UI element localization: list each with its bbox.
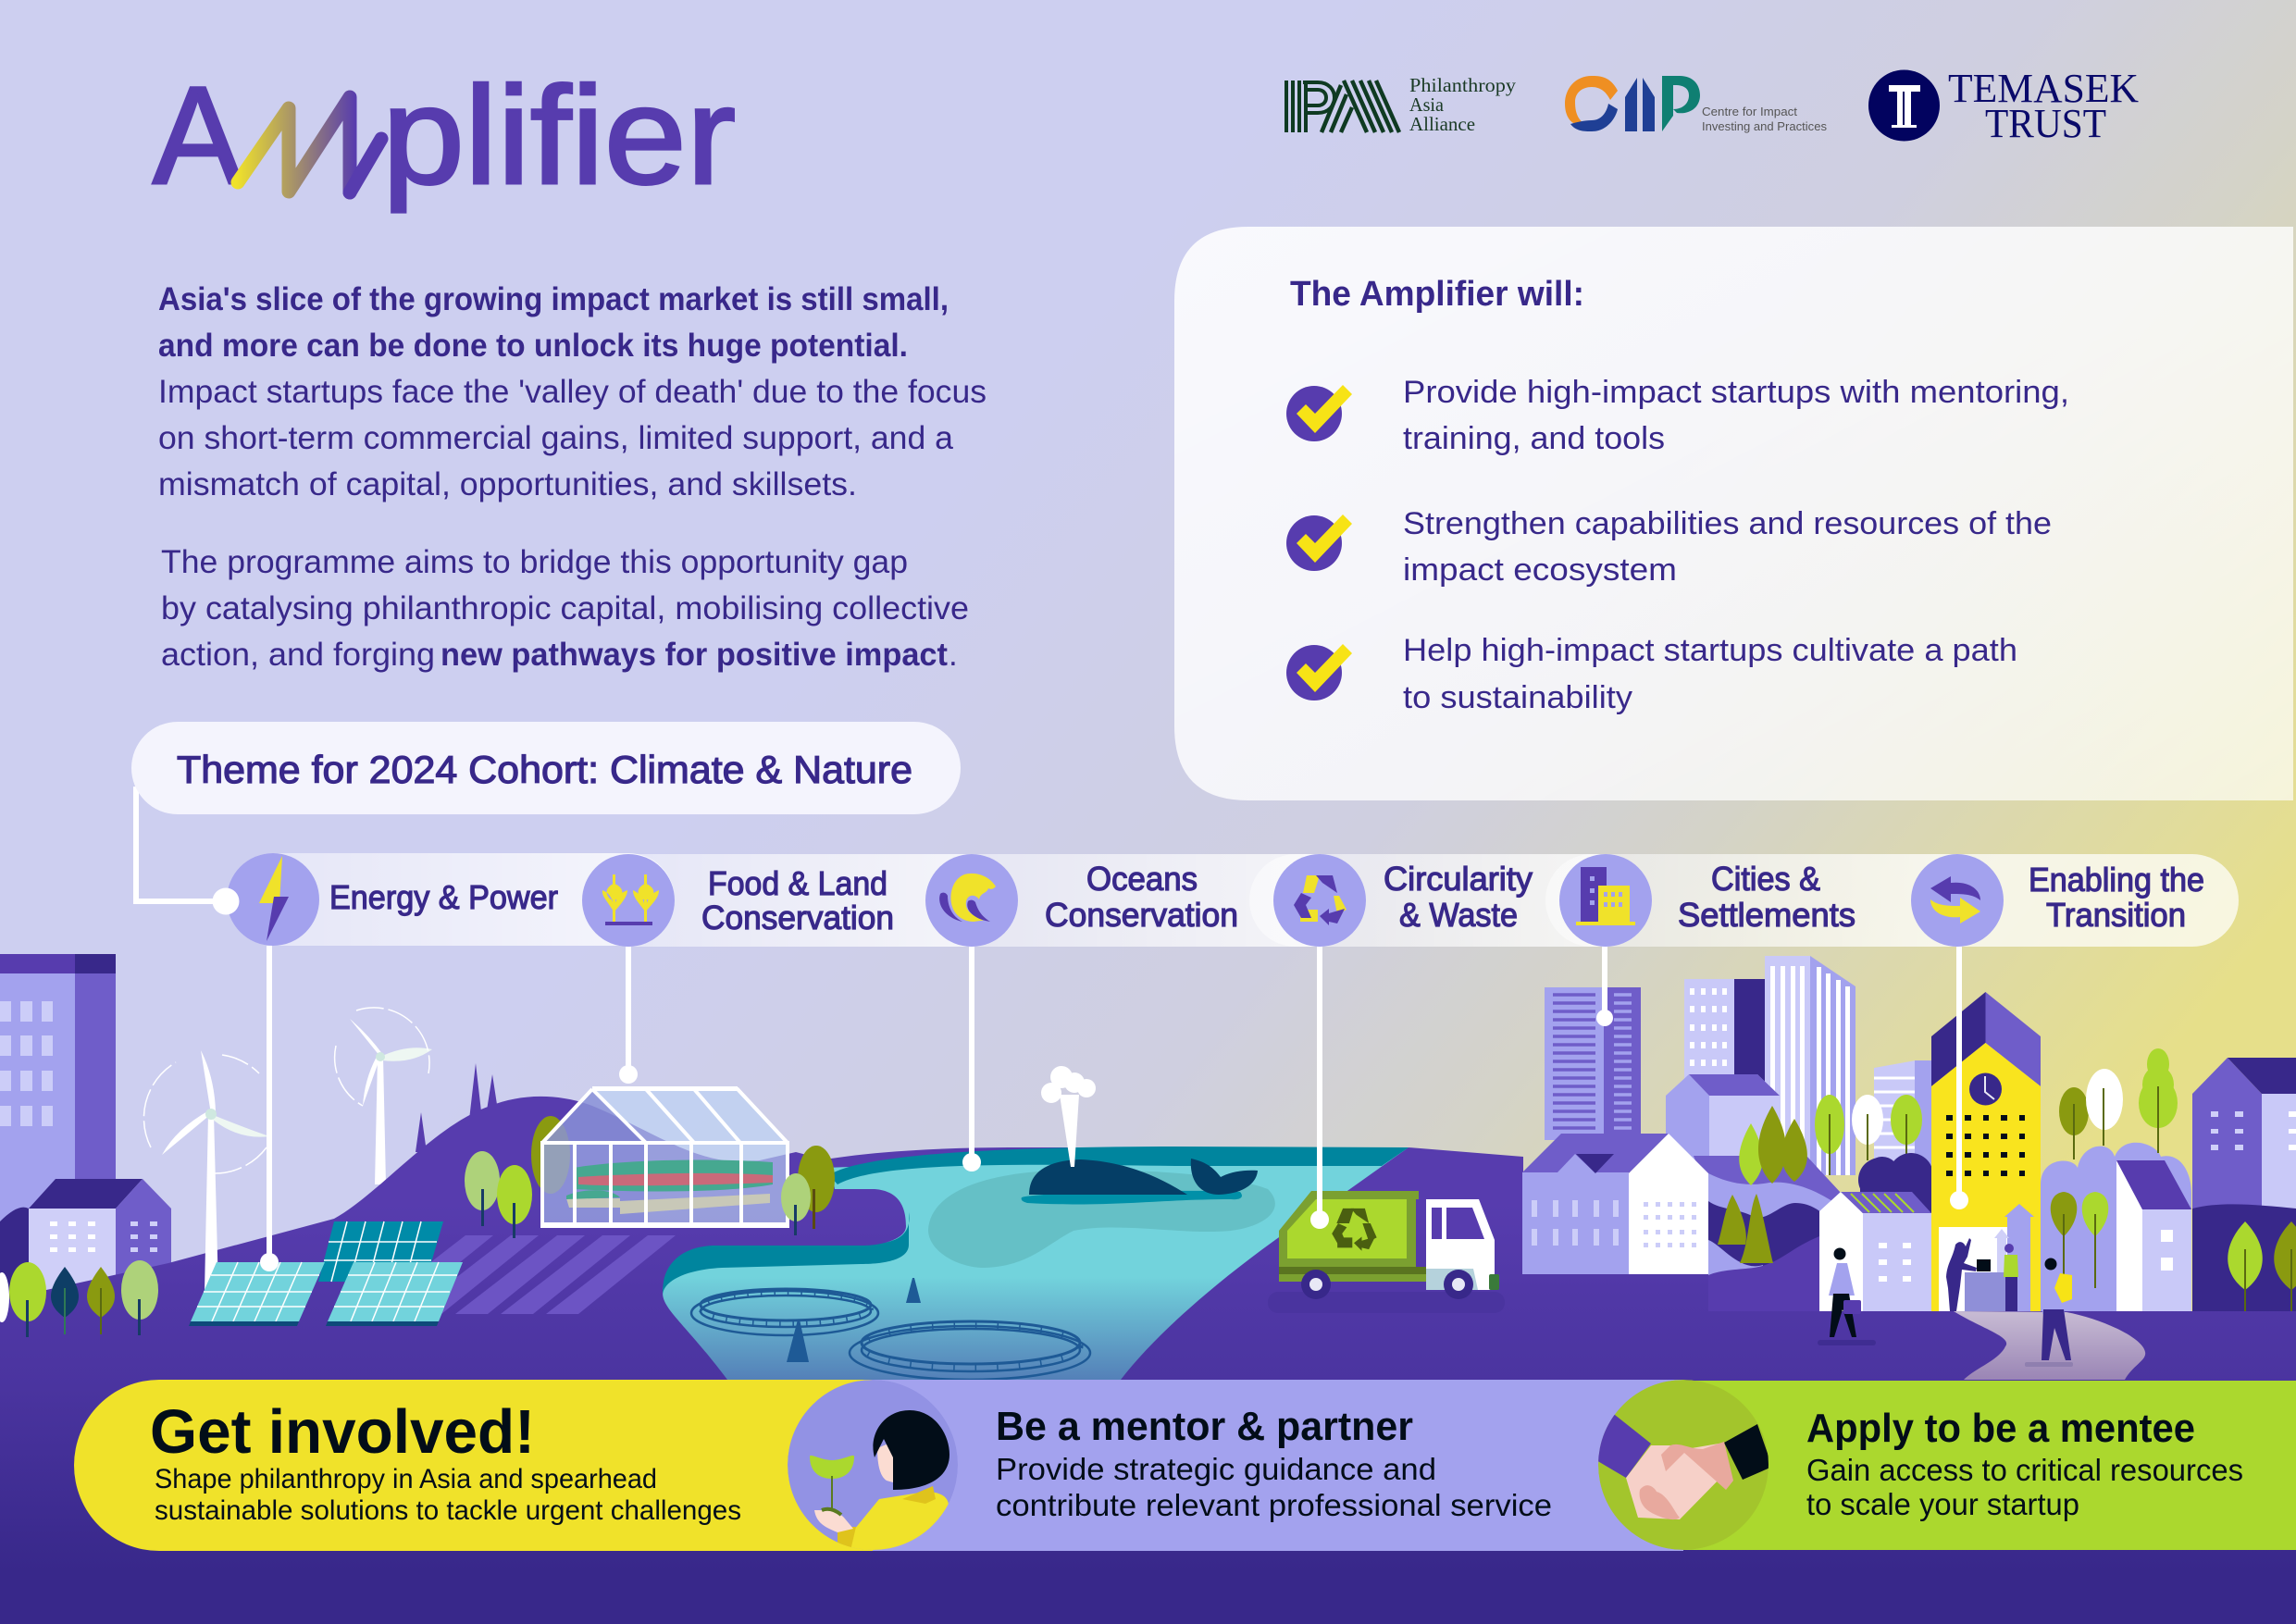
theme: Circularity & Waste: & Waste <box>1399 896 1518 934</box>
logo: Amplifier: plifier <box>382 57 736 213</box>
theme: Enabling the Transition <box>1911 854 2204 947</box>
theme: Circularity & Waste <box>1273 854 1533 947</box>
band: Be a mentor & partner <box>787 1380 1683 1551</box>
logo: Philanthropy Asia Alliance: Asia <box>1409 93 1445 116</box>
icon: woman with seedling <box>788 1380 958 1555</box>
scene: land <box>0 1097 2296 1624</box>
band: Be a mentor & partner: contribute relevant professional service <box>996 1488 1552 1522</box>
theme: Food & Land Conservation <box>582 854 894 947</box>
intro text: action, and forging <box>161 637 435 673</box>
item 3: to sustainability <box>1403 680 1632 715</box>
item 3: Help high-impact startups cultivate a path <box>1403 633 2017 668</box>
clock <box>1969 1073 2002 1105</box>
person: man walking <box>2025 1258 2073 1367</box>
band: Apply to be a mentee: Apply to be a mentee <box>1806 1406 2195 1451</box>
scene: front left house <box>1522 1134 1708 1274</box>
band: Get involved: Shape philanthropy in Asia and spearhead <box>155 1464 657 1494</box>
icon: check 3 <box>1286 644 1352 700</box>
whale spout <box>1041 1066 1096 1167</box>
item 2: Strengthen capabilities and resources of the <box>1403 506 2052 541</box>
scene: greenhouse <box>542 1086 788 1227</box>
item 1: training, and tools <box>1403 421 1665 456</box>
scene: trees near greenhouse <box>465 1151 532 1238</box>
band: Be a mentor & partner: Provide strategic guidance and <box>996 1452 1436 1486</box>
scene: tree behind greenhouse <box>531 1116 570 1194</box>
theme: Cities & Settlements <box>1559 854 1855 947</box>
logo: Philanthropy Asia Alliance <box>1286 74 1517 135</box>
scene: right lavender hill and trees <box>2041 1048 2191 1311</box>
person: woman at desk <box>1946 1238 1977 1311</box>
intro text: new pathways for positive impact <box>441 637 948 673</box>
theme: Energy & Power <box>227 853 558 946</box>
scene: clock tower <box>1931 992 2041 1311</box>
logo: Philanthropy Asia Alliance: Philanthropy <box>1409 74 1517 96</box>
item 1: Provide high-impact startups with mentoring, <box>1403 375 2069 410</box>
item 3 <box>1403 633 2017 715</box>
intro text: on short-term commercial gains, limited support, and a <box>158 420 954 456</box>
scene: house right of tower <box>2116 1160 2191 1311</box>
icon: check 2 <box>1286 514 1352 571</box>
scene: shadow patch <box>928 1170 1275 1268</box>
theme: Energy & Power: Energy & Power <box>329 878 558 916</box>
logo: Amplifier <box>153 57 736 213</box>
scene: dark bush <box>1858 1153 1933 1217</box>
band: Be a mentor & partner: Be a mentor & partner <box>996 1404 1413 1449</box>
theme: Oceans Conservation <box>925 854 1238 947</box>
logo: Temasek Trust <box>1868 66 2139 146</box>
band: Apply to be a mentee <box>1683 1381 2296 1550</box>
person: man at desk <box>2004 1244 2018 1311</box>
item 1 <box>1403 375 2069 456</box>
theme: Enabling the Transition: Transition <box>2046 896 2186 934</box>
logo: Philanthropy Asia Alliance: Alliance <box>1409 113 1475 135</box>
intro text: and more can be done to unlock its huge potential. <box>158 328 908 364</box>
scene: footpath <box>1954 1311 2145 1380</box>
scene: field stripes <box>364 1235 676 1314</box>
heading: The Amplifier will: The Amplifier will: <box>1290 275 1584 314</box>
scene: water <box>663 1147 1409 1380</box>
scene: left buildings <box>0 954 171 1305</box>
intro text: by catalysing philanthropic capital, mobilising collective <box>161 590 969 626</box>
connectors: ribbon to scene <box>213 888 1968 1271</box>
logo: Amplifier: A <box>153 57 242 213</box>
panel: theme pill <box>131 722 961 814</box>
item 2: impact ecosystem <box>1403 552 1677 588</box>
scene: trees right of greenhouse <box>781 1146 835 1235</box>
scene: right building <box>2192 1058 2296 1311</box>
scene: garbage truck <box>1268 1191 1505 1313</box>
theme: Food & Land Conservation: Conservation <box>701 899 894 936</box>
scene: wind turbine 2 <box>335 1008 432 1184</box>
person: woman walking <box>1818 1247 1876 1345</box>
band: Apply to be a mentee: Gain access to critical resources <box>1806 1453 2243 1487</box>
theme: Oceans Conservation: Conservation <box>1045 896 1238 934</box>
buoys <box>787 1278 921 1362</box>
band: Apply to be a mentee: to scale your startup <box>1806 1487 2079 1521</box>
scene: hills <box>1694 1156 1842 1311</box>
scene: white house with solar roof <box>1819 1192 1931 1311</box>
icon: truck recycle <box>1332 1209 1377 1251</box>
scene: striped tower <box>1545 987 1641 1140</box>
ribbon: themes <box>227 853 2239 947</box>
theme: Food & Land Conservation: Food & Land <box>708 864 887 902</box>
scene: whale <box>1022 1066 1258 1205</box>
scene: peninsula <box>574 1152 906 1291</box>
item 2 <box>1403 506 2052 588</box>
intro text: Impact startups face the 'valley of death' due to the focus <box>158 374 987 410</box>
logo: CIIP <box>1565 76 1828 133</box>
icon: check 1 <box>1286 385 1352 441</box>
scene: spires <box>416 1063 498 1152</box>
scene: wind turbine 1 <box>143 1050 269 1292</box>
logo: CIIP: Investing and Practices <box>1702 119 1828 133</box>
scene: front trees left <box>0 1260 158 1337</box>
connector: theme to ribbon <box>136 787 222 901</box>
scene: fish pens <box>691 1278 1090 1380</box>
intro text <box>158 281 987 673</box>
band: Get involved: sustainable solutions to tackle urgent challenges <box>155 1495 741 1526</box>
logo: Temasek Trust: TRUST <box>1985 101 2106 146</box>
panel: The Amplifier will <box>1174 227 2293 800</box>
intro text: . <box>949 637 958 673</box>
scene: hill trees <box>1718 1106 1807 1263</box>
icon: handshake <box>1592 1380 1772 1550</box>
theme: Enabling the Transition: Enabling the <box>2029 861 2204 899</box>
theme: Cities & Settlements: Settlements <box>1678 896 1855 934</box>
theme: Cities & Settlements: Cities & <box>1711 860 1820 898</box>
logo: Temasek Trust: TEMASEK <box>1948 66 2139 111</box>
theme heading: Theme for 2024 Cohort: Climate & Nature <box>177 748 912 791</box>
band: Get involved: Get involved! <box>150 1397 535 1467</box>
logo: CIIP: Centre for Impact <box>1702 105 1797 118</box>
scene: teal shoreline <box>663 1147 1409 1295</box>
band: Get involved <box>74 1380 873 1551</box>
theme: Circularity & Waste: Circularity <box>1384 860 1533 898</box>
intro text: mismatch of capital, opportunities, and skillsets. <box>158 466 857 502</box>
scene: solar panels <box>189 1221 463 1326</box>
intro text: Asia's slice of the growing impact market is still small, <box>158 281 949 317</box>
intro text: The programme aims to bridge this opportunity gap <box>161 544 908 580</box>
scene: skyscrapers <box>1666 956 1931 1175</box>
scene: trees behind clock tower <box>1815 1095 1922 1175</box>
theme: Oceans Conservation: Oceans <box>1086 860 1198 898</box>
